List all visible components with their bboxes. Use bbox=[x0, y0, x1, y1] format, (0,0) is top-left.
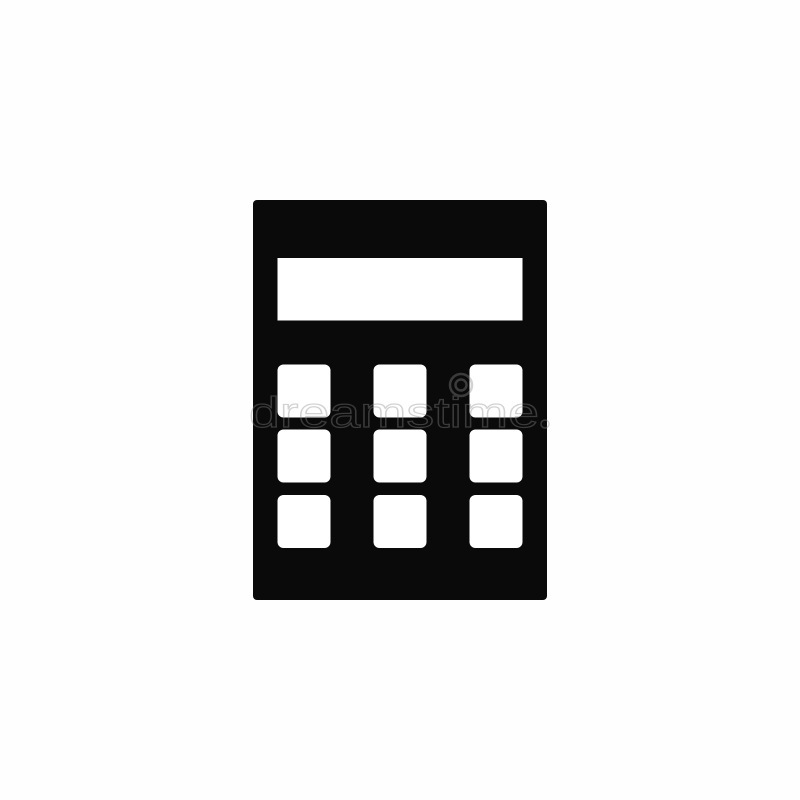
icon: calculator bbox=[253, 200, 547, 600]
keypad bbox=[278, 364, 522, 548]
watermark bbox=[249, 374, 549, 437]
watermark swirl bbox=[450, 374, 472, 396]
watermark registered mark bbox=[541, 420, 549, 428]
calculator display bbox=[278, 258, 522, 320]
watermark text: dreamstime bbox=[249, 389, 539, 437]
calculator body bbox=[253, 200, 547, 600]
